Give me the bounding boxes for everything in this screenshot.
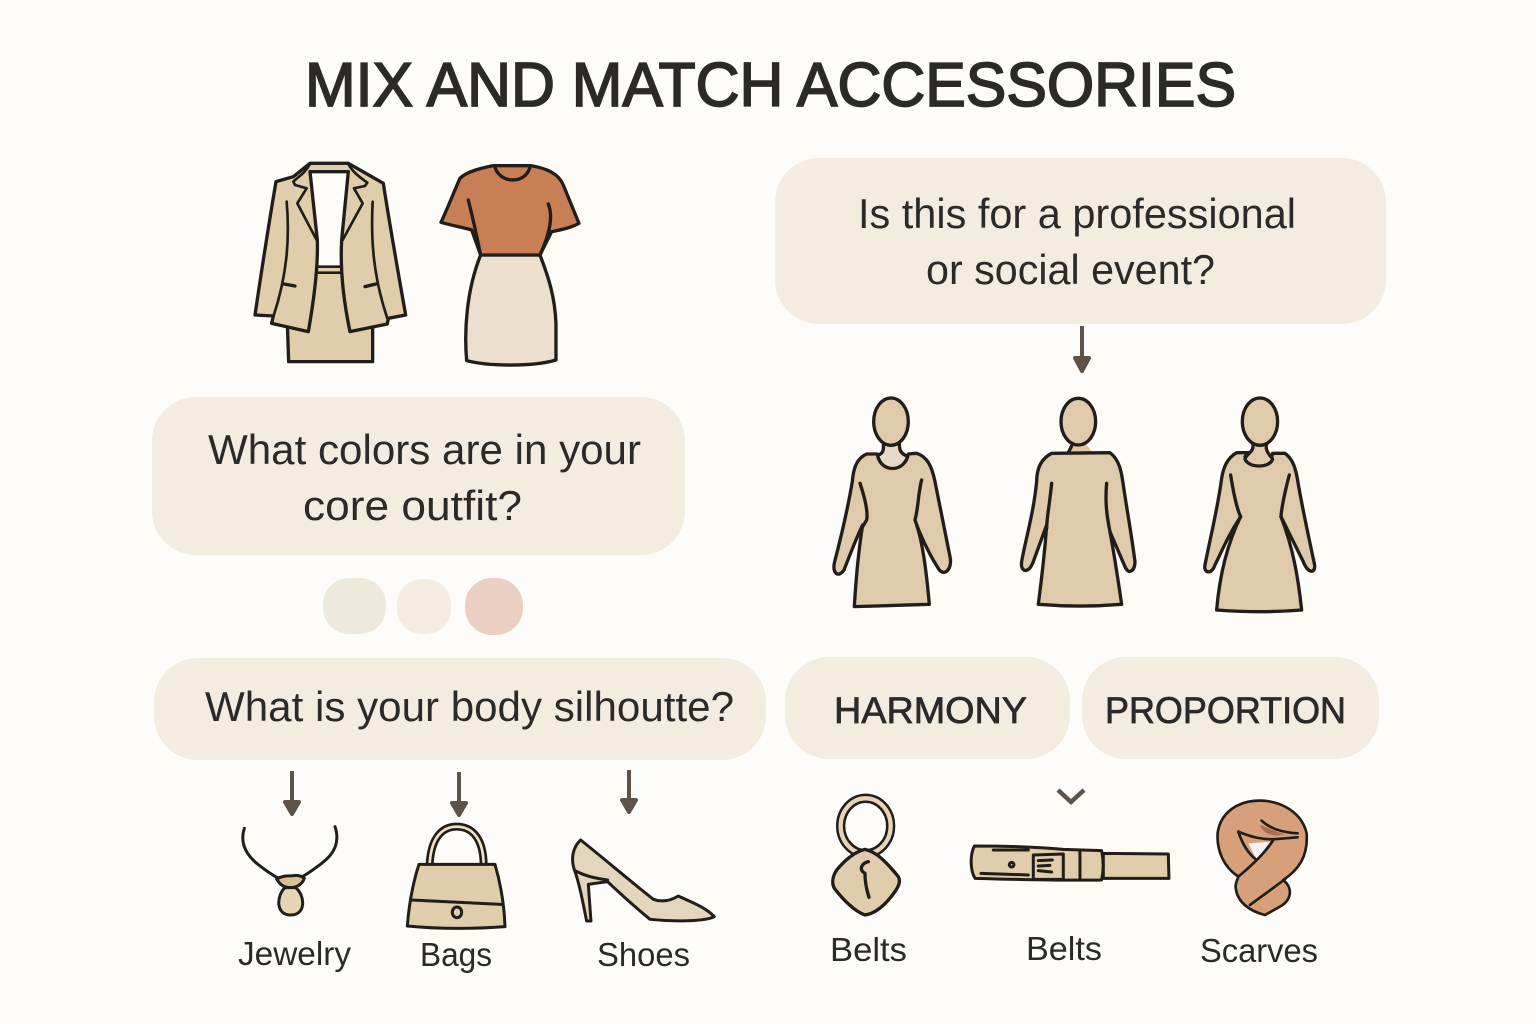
icon: handbag (407, 827, 505, 928)
label: jewelry: Jewelry (238, 935, 352, 972)
question panel: event: or social event? (926, 246, 1215, 293)
question panel: colors: What colors are in your (208, 426, 641, 473)
question panel: silhouette (154, 658, 766, 760)
label panel: harmony (785, 657, 1070, 759)
label: shoes: Shoes (597, 936, 690, 973)
label: scarves: Scarves (1200, 932, 1318, 969)
illustration: rust top and cream skirt (441, 166, 579, 365)
arrow: event to silhouettes (1075, 326, 1089, 371)
label: bags: Bags (420, 936, 492, 973)
icon: ring pendant (833, 798, 899, 915)
silhouettes (834, 398, 1315, 612)
silhouette three (1205, 398, 1315, 612)
arrow: to shoes (622, 770, 636, 812)
chevron (1058, 790, 1084, 802)
question panel: event: Is this for a professional (858, 190, 1296, 237)
question panel: event (775, 158, 1386, 324)
illustration: beige blazer and skirt suit (255, 163, 406, 362)
silhouette two (1021, 398, 1135, 606)
label panel: proportion: PROPORTION (1105, 690, 1346, 731)
arrow: to jewelry (285, 771, 299, 814)
question panel: colors (152, 397, 685, 555)
label: belts (centre): Belts (1026, 930, 1102, 967)
icon: belt (971, 846, 1169, 880)
icon: scarf (1218, 801, 1307, 915)
title: MIX AND MATCH ACCESSORIES (305, 51, 1236, 120)
label panel: proportion (1082, 657, 1379, 759)
icon: necklace (243, 827, 337, 915)
icon: high heel shoe (573, 840, 714, 921)
question panel: colors: core outfit? (303, 482, 522, 529)
label panel: harmony: HARMONY (834, 690, 1027, 731)
silhouette one (834, 398, 951, 607)
question panel: silhouette: What is your body silhoutte? (205, 683, 734, 730)
colour swatches (323, 578, 523, 635)
arrow: to bags (452, 772, 466, 815)
label: belts (left): Belts (830, 931, 907, 968)
